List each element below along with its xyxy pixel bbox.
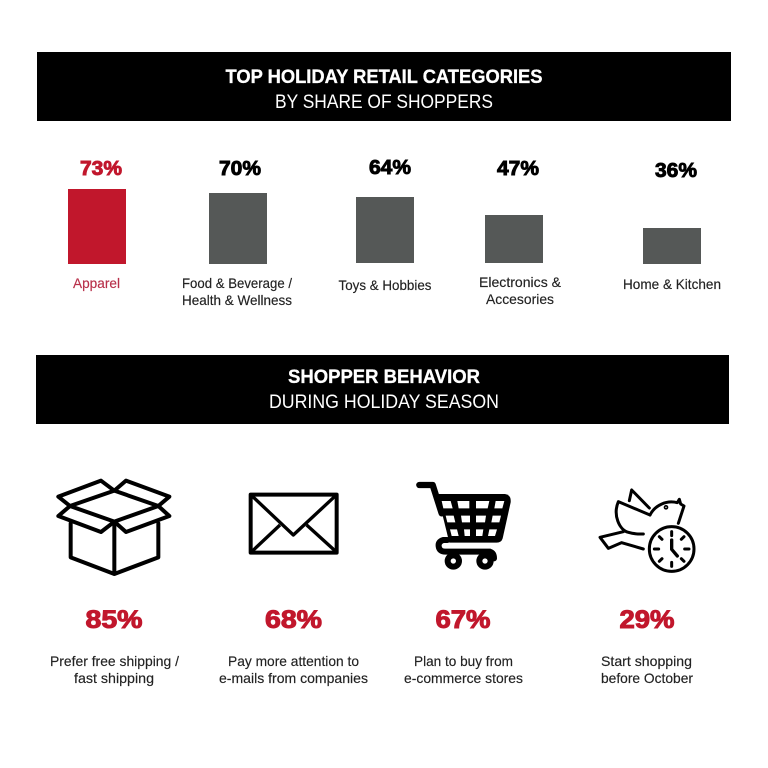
stat: 29%: 29%: [620, 606, 674, 634]
caption: free shipping: [50, 653, 179, 686]
banner: top holiday retail categories: [37, 52, 731, 121]
caption: e-mails: e-mails from companies: [219, 670, 368, 686]
panel: free shipping: [50, 481, 179, 686]
caption: e-commerce: Plan to buy from: [414, 653, 513, 669]
stat: 85%: 85%: [86, 606, 142, 634]
stat: 67%: 67%: [436, 606, 490, 634]
bar: electronics and accessories 47%: 47%: [497, 158, 539, 180]
caption: e-commerce: [404, 653, 523, 686]
bar: food and beverage 70%: [182, 158, 292, 308]
caption: free shipping: fast shipping: [74, 670, 154, 686]
bar: toys and hobbies 64%: Toys & Hobbies: [338, 277, 432, 293]
caption: early shopping: before October: [601, 670, 693, 686]
caption: free shipping: Prefer free shipping /: [50, 653, 179, 669]
icon: bird and clock: [600, 490, 694, 571]
panel: e-mails: [219, 495, 368, 686]
icon: shopping cart: [419, 485, 511, 567]
bar: food and beverage 70%: Food & Beverage /: [182, 275, 292, 291]
caption: e-commerce: e-commerce stores: [404, 670, 523, 686]
banner: shopper behavior: [36, 355, 729, 424]
stat: 68%: 68%: [265, 606, 322, 634]
bar: electronics and accessories 47%: Accesories: [486, 291, 554, 307]
caption: early shopping: [601, 653, 693, 686]
bar: toys and hobbies 64%: 64%: [369, 157, 411, 179]
bar: apparel 73%: Apparel: [73, 275, 120, 291]
panel: early shopping: [600, 490, 694, 686]
bar: electronics and accessories 47%: [479, 158, 562, 307]
heading: top holiday retail categories: TOP HOLIDAY RETAIL CATEGORIES: [226, 67, 542, 88]
caption: e-mails: [219, 653, 368, 686]
caption: early shopping: Start shopping: [601, 653, 692, 669]
bar: home and kitchen 36%: [623, 160, 721, 292]
subheading: by share of shoppers: BY SHARE OF SHOPPERS: [275, 92, 493, 113]
icon: envelope: [251, 495, 337, 553]
bar: home and kitchen 36%: 36%: [655, 160, 697, 182]
bar: apparel 73%: 73%: [80, 158, 122, 180]
bar: food and beverage 70%: 70%: [219, 158, 261, 180]
caption: e-mails: Pay more attention to: [228, 653, 359, 669]
icon: open box: [58, 481, 169, 574]
bar: home and kitchen 36%: Home & Kitchen: [623, 276, 721, 292]
heading: shopper behavior: SHOPPER BEHAVIOR: [288, 367, 480, 388]
bar: toys and hobbies 64%: [338, 157, 432, 293]
subheading: during holiday season: DURING HOLIDAY SEASON: [269, 392, 499, 413]
bar: food and beverage 70%: Health & Wellness: [182, 292, 292, 308]
bar: apparel 73%: [68, 158, 126, 291]
panel: e-commerce: [404, 485, 523, 686]
bar: electronics and accessories 47%: Electronics &: [479, 274, 562, 290]
bar chart: retail categories: [68, 157, 721, 308]
